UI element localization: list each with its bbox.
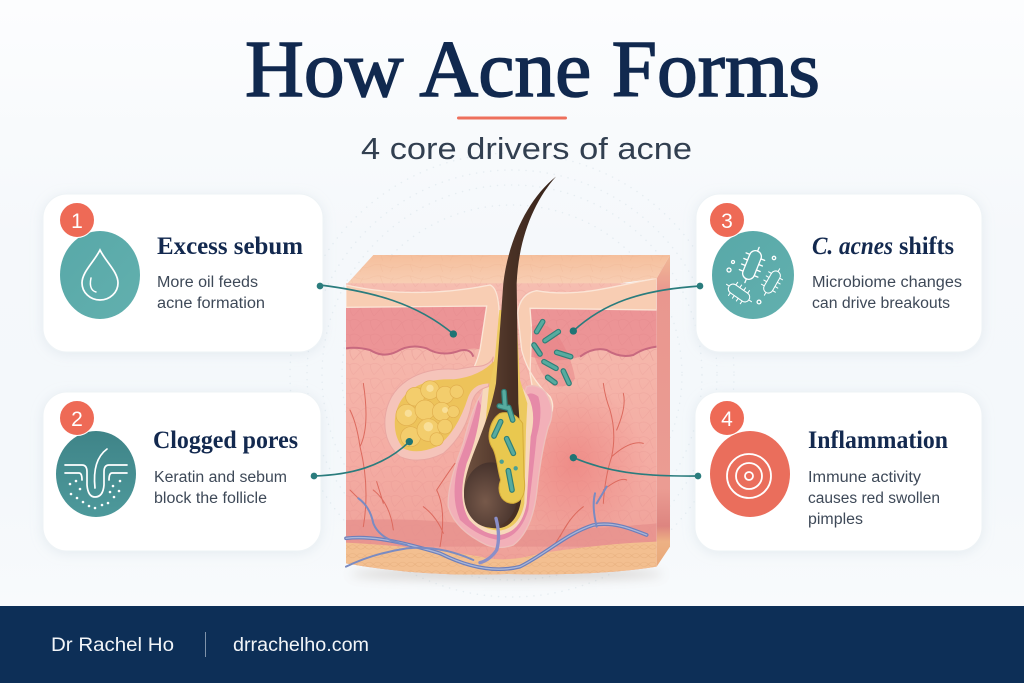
heading: clogged pores: Clogged pores: [153, 427, 298, 454]
title: How Acne Forms: [245, 24, 820, 114]
blue veins: [346, 487, 647, 569]
text: c. acnes description: Microbiome changes: [812, 274, 962, 291]
heading: c. acnes shifts: C. acnes: [812, 233, 893, 260]
panel: card 3 c. acnes shifts: [696, 194, 982, 352]
text: excess sebum description: [157, 274, 265, 312]
badge 3: 3: [721, 210, 733, 233]
sebaceous gland: [385, 357, 495, 460]
icon: inflammation target: [710, 431, 790, 517]
papillary pink band right: [522, 308, 657, 360]
text: inflammation description: causes red swollen: [808, 490, 940, 507]
text: clogged pores description: [154, 469, 287, 507]
text: inflammation description: pimples: [808, 511, 863, 528]
text: c. acnes description: can drive breakouts: [812, 295, 950, 312]
subtitle: 4 core drivers of acne: [361, 131, 692, 166]
dotted rings behind diagram: [290, 153, 734, 597]
footer bar: [0, 606, 1024, 683]
inflamed bacteria patch: [532, 324, 575, 386]
front face layers: [346, 278, 659, 577]
heading: c. acnes shifts: [812, 233, 954, 260]
bacteria in plug: [494, 392, 516, 490]
text: c. acnes description: [812, 274, 962, 312]
icon: bacteria: [712, 231, 794, 319]
text: clogged pores description: block the follicle: [154, 490, 267, 507]
badge 3: [710, 202, 744, 238]
clogged sebum plug: [489, 413, 525, 503]
text: inflammation description: [808, 469, 940, 528]
follicle sheath: [448, 386, 552, 547]
red capillaries: [350, 383, 643, 547]
badge 2: 2: [71, 408, 83, 431]
footer name: Dr Rachel Ho: [51, 635, 174, 656]
top surface of skin block: [346, 255, 670, 294]
hair shaft and bulb: [464, 177, 556, 528]
footer website: drrachelho.com: [233, 635, 369, 656]
epidermis right: [518, 278, 657, 423]
lower dermis band: [346, 519, 657, 547]
badge 4: [710, 400, 744, 436]
free bacteria cluster: [534, 322, 571, 383]
leader line clogged pores: [311, 438, 413, 479]
panel: card 1 excess sebum: [43, 194, 323, 352]
icon: oil drop: [60, 231, 140, 319]
epidermis left: [346, 285, 499, 372]
fat layer: [346, 542, 657, 577]
leader line c. acnes: [570, 283, 703, 335]
icon: clogged follicle: [56, 431, 136, 517]
follicle cream lining: [462, 387, 533, 535]
leader line inflammation: [570, 454, 701, 479]
badge 4: 4: [721, 408, 733, 431]
yellow sebum lining: [467, 310, 527, 531]
panel: card 4 inflammation: [695, 392, 982, 551]
heading: inflammation: Inflammation: [808, 427, 948, 454]
leader line excess sebum: [317, 283, 457, 338]
hair root vessel: [480, 518, 499, 563]
papillary pink band left: [346, 306, 488, 355]
text: excess sebum description: acne formation: [157, 295, 265, 312]
skin cross-section diagram: [311, 177, 703, 580]
text: excess sebum description: More oil feeds: [157, 274, 258, 291]
title accent rule: [457, 116, 567, 120]
heading: excess sebum: Excess sebum: [157, 233, 303, 260]
panel: card 2 clogged pores: [43, 392, 321, 551]
badge 2: [60, 400, 94, 436]
follicle inner pink layer: [455, 393, 540, 540]
text: inflammation description: Immune activity: [808, 469, 921, 486]
right side face of skin block: [657, 255, 670, 567]
heading: c. acnes shifts: shifts: [899, 233, 954, 260]
badge 1: 1: [71, 210, 83, 233]
badge 1: [60, 202, 94, 238]
text: clogged pores description: Keratin and sebum: [154, 469, 287, 486]
